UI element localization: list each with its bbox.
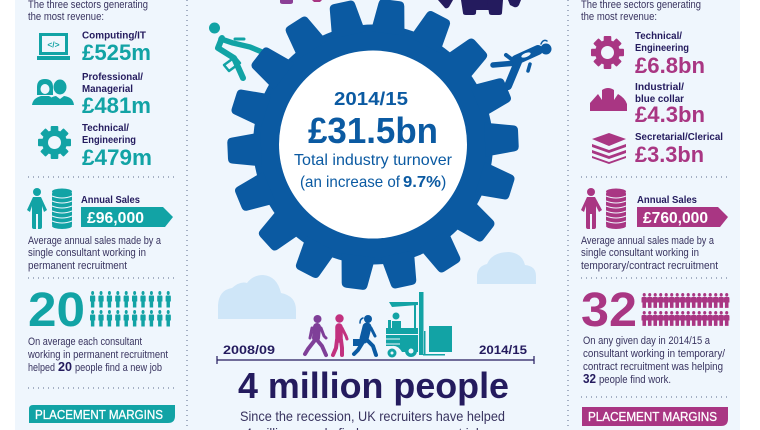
stat: professional: £481m: [82, 93, 151, 118]
stat: industrial: Industrial/: [635, 81, 684, 93]
stat: technical: Technical/: [82, 122, 129, 134]
turnover text: 2014/15: [334, 89, 408, 109]
placement margins banner: PLACEMENT MARGINS: [35, 407, 163, 422]
stat: secretarial: Secretarial/Clerical: [635, 131, 723, 143]
body text: Since the recession, UK recruiters have helped: [240, 408, 505, 424]
intro text right: [581, 0, 701, 23]
people grid purple: [642, 293, 729, 326]
forklift: [386, 292, 452, 358]
stat: industrial: £4.3bn: [635, 102, 705, 127]
stat: technical: [635, 30, 705, 78]
text: people helped: On any given day in 2014/15 a: [583, 335, 711, 347]
big number 32: 32: [581, 284, 637, 337]
annual sales banner purple: £760,000: [643, 210, 708, 227]
text: annual sales: permanent recruitment: [28, 260, 127, 272]
stat: technical: Technical/: [635, 30, 682, 42]
turnover text: ): [441, 174, 446, 191]
icon: computer: [37, 33, 70, 60]
stat: professional: [82, 71, 151, 118]
text: people placed: 20: [58, 359, 72, 374]
stat: secretarial: £3.3bn: [635, 142, 704, 167]
panel: permanent recruitment: [27, 0, 175, 423]
text: people placed: On average each consultant: [28, 336, 142, 348]
icon: gear teal: [38, 126, 71, 159]
text: people helped: contract recruitment was helping: [583, 361, 723, 373]
stat: technical: Engineering: [82, 134, 136, 146]
text: annual sales: [28, 235, 162, 272]
text: annual sales: Average annual sales made by a: [28, 235, 162, 247]
text: people helped: 32: [583, 371, 596, 386]
text: people helped: consultant working in temporary/: [583, 348, 726, 360]
stat: industrial: blue collar: [635, 93, 684, 105]
turnover text: Total industry turnover: [294, 152, 453, 169]
stat: computing: [82, 30, 151, 65]
timeline: [217, 343, 534, 364]
stat: technical: £6.8bn: [635, 53, 705, 78]
annual sales banner: £96,000: [87, 210, 144, 227]
timeline: 2014/15: [479, 343, 527, 357]
text: people placed: working in permanent recruitment: [27, 349, 168, 361]
stat: secretarial: [635, 131, 723, 167]
text: annual sales: single consultant working in: [28, 247, 146, 259]
panel: centre: [209, 0, 552, 430]
cloud right: [477, 252, 536, 284]
cloud left: [218, 275, 296, 319]
icon: gear purple: [591, 36, 624, 69]
text: people helped: people find work.: [599, 374, 671, 386]
annual sales banner purple: [637, 194, 728, 227]
walker blue with bag: [353, 315, 376, 355]
text: annual sales: single consultant working in: [581, 247, 699, 259]
text: annual sales: Average annual sales made by a: [581, 235, 715, 247]
stat: professional: Managerial: [82, 83, 133, 95]
stat: technical: [82, 122, 152, 170]
turnover text: £31.5bn: [308, 110, 438, 151]
icon: computer: </>: [47, 40, 60, 50]
top gear fragments: [280, 0, 521, 15]
body text: [240, 408, 505, 430]
people grid teal: [90, 291, 171, 326]
annual sales banner: Annual Sales: [81, 194, 140, 206]
icon: paper stack: [592, 133, 626, 164]
stat: computing: Computing/IT: [82, 30, 147, 42]
text: people placed: helped: [28, 362, 55, 374]
walker purple: [305, 315, 326, 355]
intro text left: the most revenue:: [28, 11, 104, 23]
text: annual sales: temporary/contract recruitment: [581, 260, 718, 272]
headline: 4 million people: [238, 365, 509, 406]
icon: hard hat: [590, 88, 627, 111]
panel: temporary recruitment: [581, 0, 729, 426]
timeline: 2008/09: [223, 343, 275, 357]
annual sales banner purple: Annual Sales: [637, 194, 697, 206]
turnover text: (an increase of: [300, 174, 401, 191]
stat: technical: Engineering: [635, 42, 689, 54]
walker pink: [333, 314, 347, 355]
intro text right: the most revenue:: [581, 11, 657, 23]
blue figure on gear: [493, 40, 552, 86]
stat: computing: £525m: [82, 40, 151, 65]
stat: industrial: [635, 81, 705, 127]
text: people placed: [27, 336, 168, 374]
big number 20: 20: [28, 284, 85, 337]
text: annual sales: [581, 235, 718, 272]
text: people placed: people find a new job: [75, 362, 162, 374]
icon: person and coins purple: [581, 188, 626, 229]
stat: professional: Professional/: [82, 71, 143, 83]
text: people helped: [583, 335, 726, 386]
turnover text: [294, 89, 453, 191]
teal figure pushing gear: [209, 22, 262, 78]
icon: two professionals: [32, 79, 74, 105]
stat: technical: £479m: [82, 145, 152, 170]
annual sales banner: [81, 194, 173, 227]
large gear: [227, 0, 519, 291]
turnover text: 9.7%: [403, 174, 441, 191]
placement margins banner purple: PLACEMENT MARGINS: [588, 409, 717, 424]
intro text left: [28, 0, 148, 23]
icon: person and coins: [27, 188, 72, 229]
